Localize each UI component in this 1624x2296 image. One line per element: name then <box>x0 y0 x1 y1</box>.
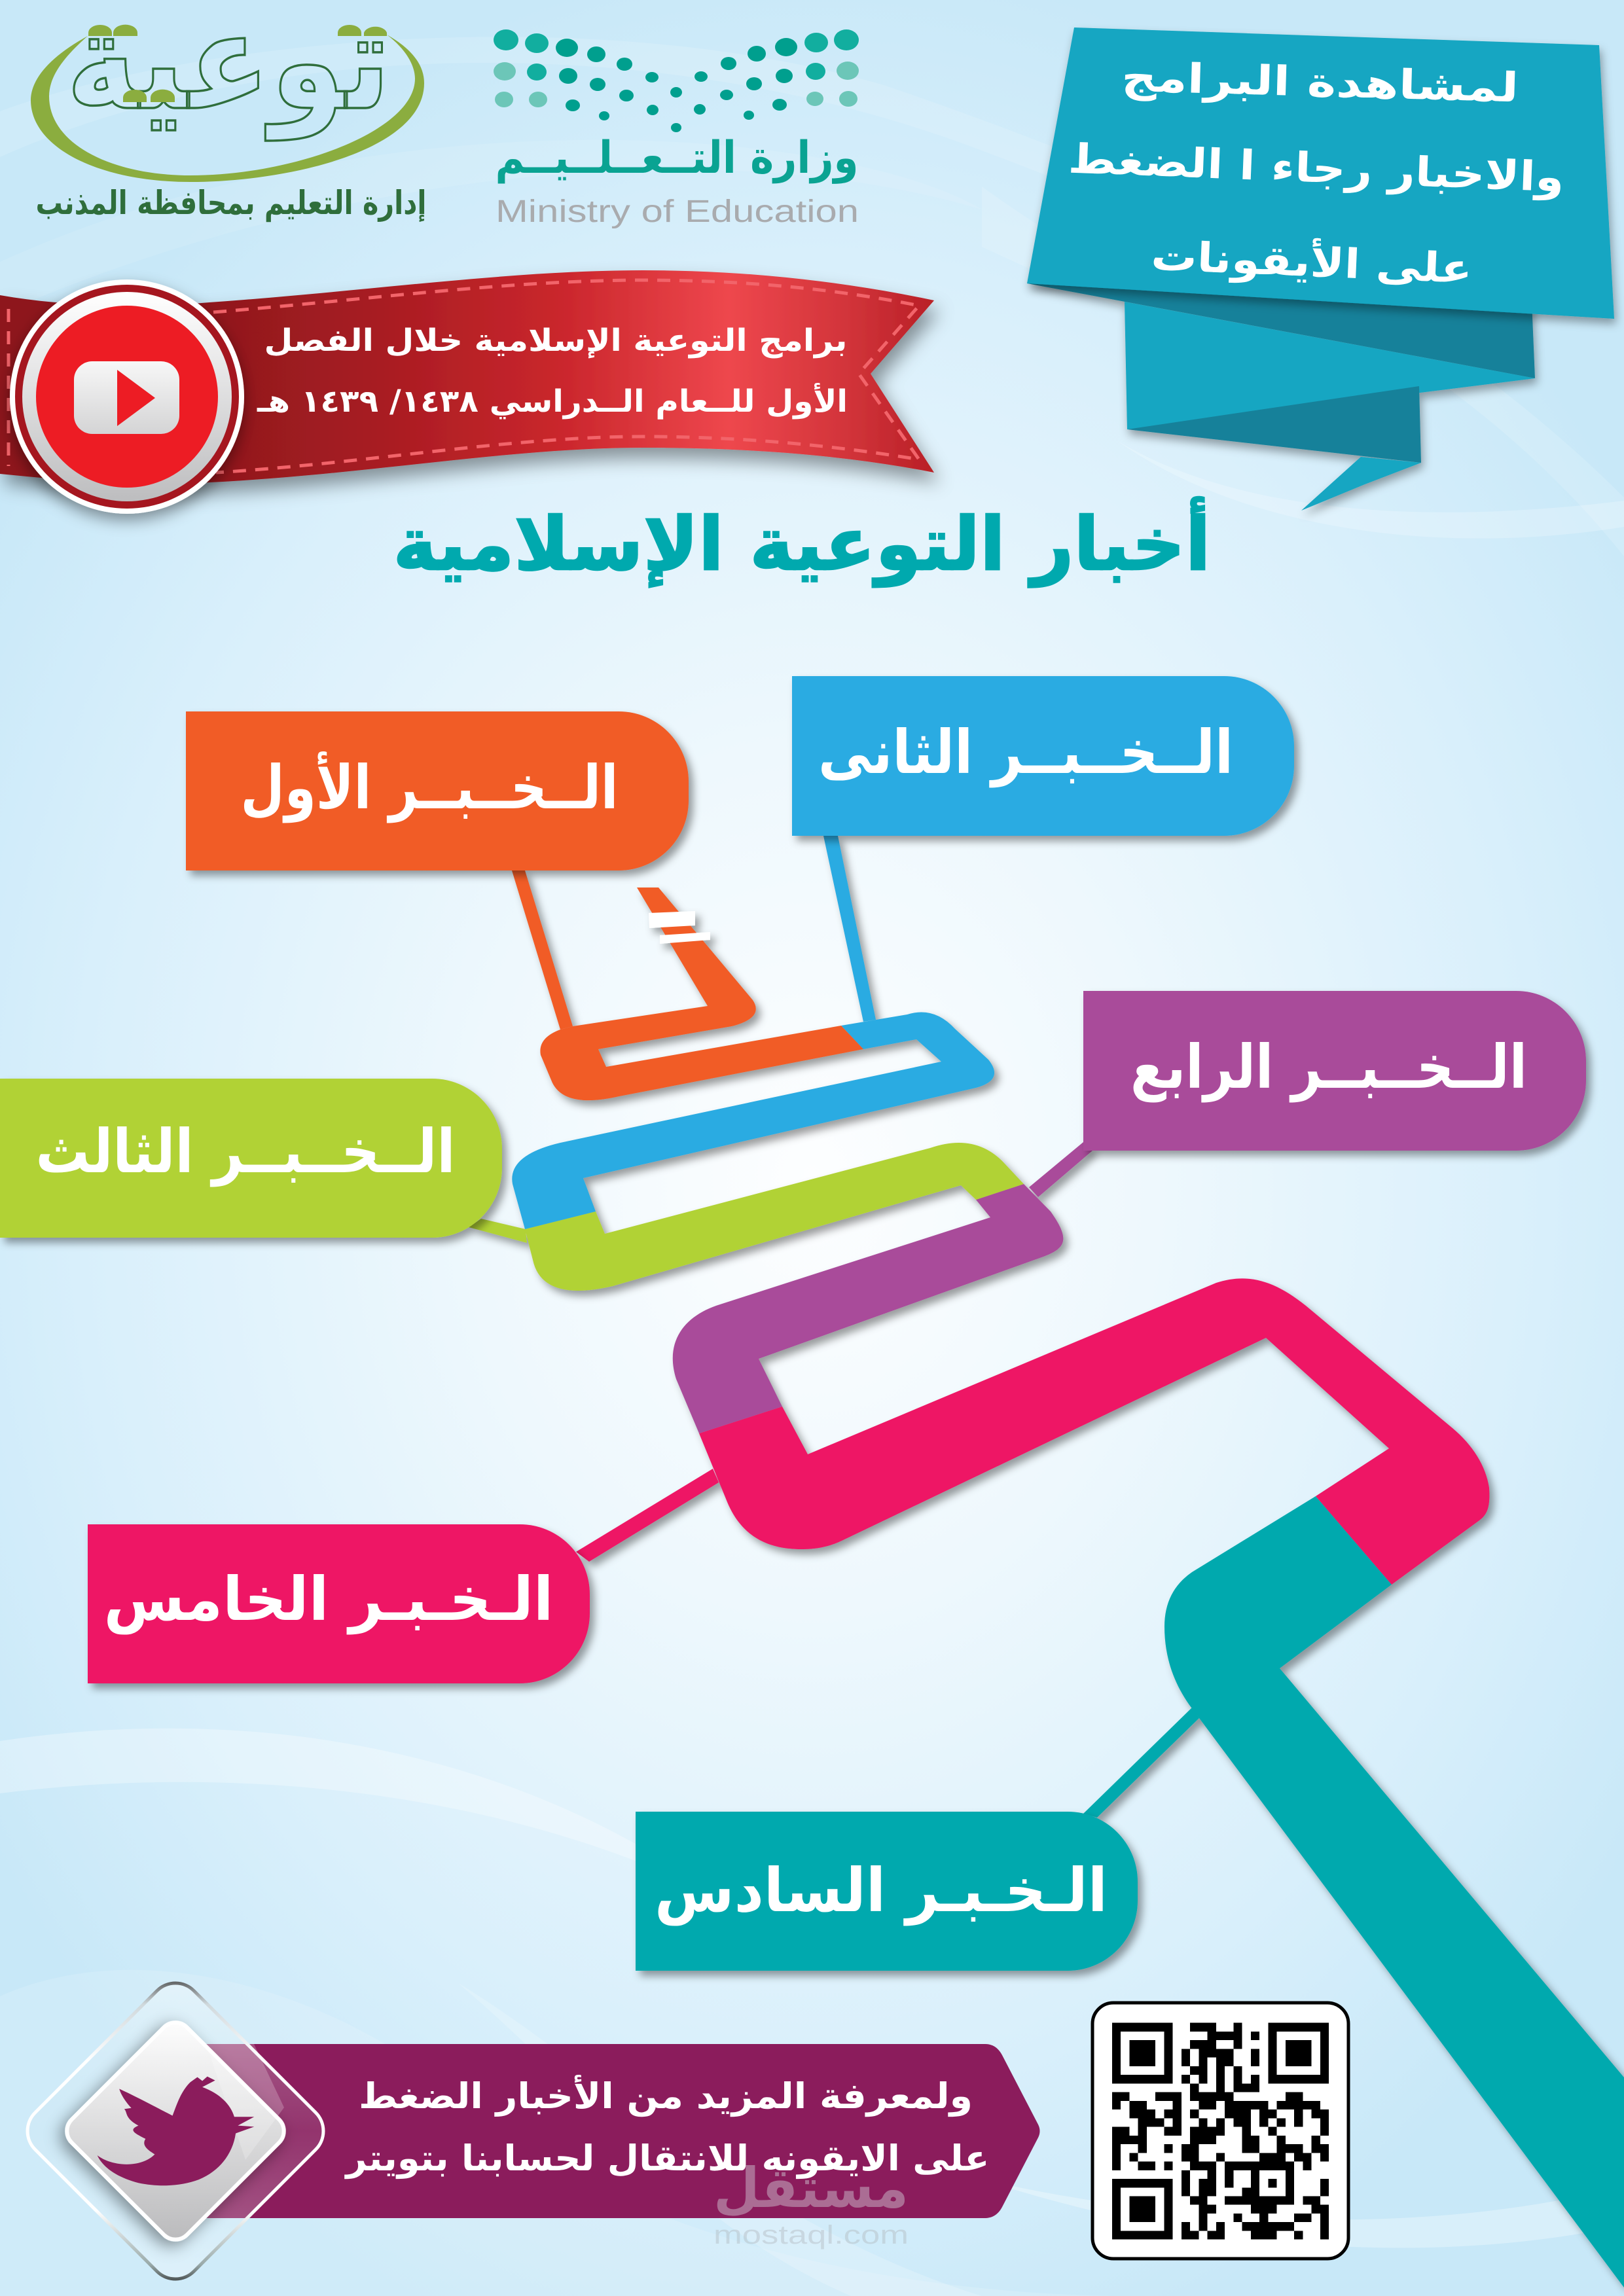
label: news 6 <box>636 1812 1138 1971</box>
qr code <box>1092 2003 1348 2259</box>
connector: pink <box>576 1469 719 1562</box>
logo crescent <box>31 35 424 182</box>
label: news 3 <box>0 1079 502 1238</box>
logo dots <box>88 25 387 102</box>
ribbon shape <box>0 270 934 484</box>
icon: youtube button <box>10 279 244 514</box>
roller segment: green <box>525 1143 1024 1291</box>
watermark <box>713 2156 909 2250</box>
label: news 5: الـخـبـر الخامس <box>103 1564 554 1635</box>
watermark: مستقل <box>713 2156 909 2220</box>
red ribbon banner <box>0 270 934 484</box>
ministry arabic name: وزارة التــعــلــيــم <box>495 132 859 184</box>
glass outer diamond <box>16 1972 334 2290</box>
banner text: على الايقونه للانتقال لحسابنا بتويتر <box>344 2138 990 2179</box>
glass highlight <box>206 2044 284 2160</box>
roller segment: blue <box>512 1012 994 1229</box>
banner text <box>344 2075 990 2179</box>
callout text: لمشاهدة البرامج <box>1121 53 1519 111</box>
ribbon stitching <box>9 280 919 473</box>
roller path <box>469 836 1624 2287</box>
origami callout <box>1027 27 1614 511</box>
banner shape <box>206 2044 1039 2218</box>
ribbon text <box>257 323 848 420</box>
logo subtitle: إدارة التعليم بمحافظة المذنب <box>35 184 427 223</box>
qr card <box>1092 2003 1348 2259</box>
roller segment: pink <box>699 1278 1489 1585</box>
callout text: على الأيقونات <box>1150 231 1473 293</box>
ministry english name: Ministry of Education <box>496 194 859 229</box>
connector: teal <box>1083 1708 1199 1818</box>
logo: Ministry of Education <box>494 29 859 229</box>
callout text: والاخبار رجاء ا الضغط <box>1068 134 1565 202</box>
roller segment: teal <box>1164 1496 1624 2287</box>
title: أخبار التوعية الإسلامية <box>393 497 1211 588</box>
label: news 2 <box>792 676 1294 836</box>
roller segment: orange <box>540 888 863 1100</box>
qr modules <box>1112 2023 1329 2240</box>
inner diamond <box>60 2016 291 2246</box>
logo: Tawiah <box>31 0 427 223</box>
watermark: mostaql.com <box>713 2221 909 2250</box>
decorative white bars <box>649 911 710 944</box>
ministry dots <box>494 29 859 132</box>
banner text: ولمعرفة المزيد من الأخبار الضغط <box>359 2075 973 2117</box>
ribbon text: الأول للــعام الــدراسي ١٤٣٨/ ١٤٣٩ هـ <box>257 382 848 420</box>
roller segment: purple <box>673 1184 1063 1433</box>
label: news 4 <box>1083 991 1586 1151</box>
ribbon text: برامج التوعية الإسلامية خلال الفصل <box>264 323 847 359</box>
connector: purple <box>1029 1142 1092 1197</box>
connector: blue <box>823 836 876 1022</box>
label: news 2: الــخــبــر الثانى <box>818 717 1233 788</box>
callout text <box>1068 53 1565 293</box>
connector: orange <box>512 870 573 1030</box>
label: news 6: الـخـبـر السادس <box>655 1856 1108 1926</box>
callout folds <box>1027 275 1535 511</box>
twitter banner <box>206 2044 1039 2218</box>
label: news 4: الــخــبــر الرابع <box>1130 1032 1527 1103</box>
icon: bird <box>98 2077 254 2185</box>
icon: twitter glass diamond <box>16 1972 334 2290</box>
label: news 1 <box>186 711 689 870</box>
label: news 1: الــخــبــر الأول <box>241 751 618 823</box>
connector: green <box>469 1219 527 1243</box>
callout panel <box>1027 27 1614 319</box>
label: news 5 <box>88 1524 590 1683</box>
label: news 3: الــخــبــر الثالث <box>35 1117 456 1187</box>
